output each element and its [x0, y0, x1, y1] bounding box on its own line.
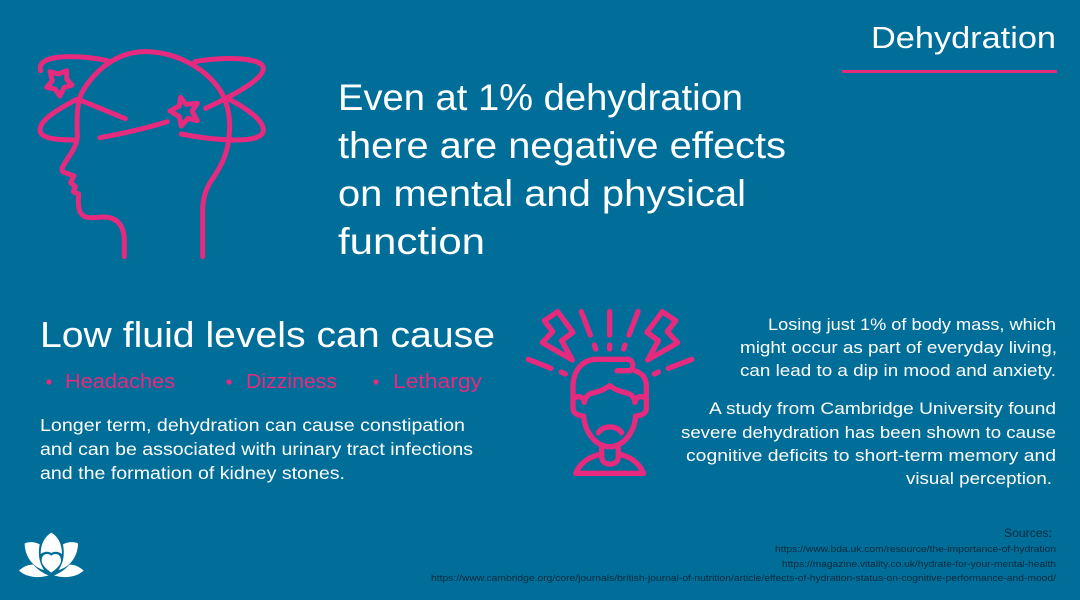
symptom list [46, 371, 482, 393]
sources [431, 528, 1057, 583]
text block: long-term effects [40, 415, 473, 483]
symptom list: Lethargy [393, 371, 482, 393]
heading: key statement: there are negative effects [338, 125, 786, 166]
text block: Cambridge study: cognitive deficits to short-term memory and [686, 446, 1056, 465]
sources: https://www.cambridge.org/core/journals/british-journal-of-nutrition/article/effects-of-hydration-status-on-cognitive-performance-and-mood/ [431, 573, 1057, 583]
text block: Cambridge study: severe dehydration has been shown to cause [681, 423, 1056, 442]
icon: man with headache [528, 312, 692, 473]
heading: low fluid levels: Low fluid levels can cause [40, 314, 495, 355]
text block: Cambridge study: A study from Cambridge University found [709, 399, 1056, 418]
title: Dehydration: Dehydration [871, 20, 1056, 55]
text block: Cambridge study: visual perception. [906, 469, 1052, 488]
text block: mood and anxiety [740, 315, 1057, 380]
symptom list: Headaches [65, 371, 175, 393]
text block: Cambridge study [681, 399, 1056, 488]
text block: long-term effects: and can be associated with urinary tract infections [40, 439, 473, 459]
symptom list: Dizziness [246, 371, 337, 393]
sources: https://www.bda.uk.com/resource/the-importance-of-hydration [775, 544, 1056, 554]
text block: long-term effects: Longer term, dehydration can cause constipation [40, 415, 465, 435]
text block: mood and anxiety: Losing just 1% of body mass, which [768, 315, 1056, 334]
text block: mood and anxiety: can lead to a dip in mood and anxiety. [740, 361, 1056, 380]
heading: key statement: function [338, 221, 485, 262]
title: Dehydration [842, 20, 1057, 73]
logo: white lotus with heart [19, 533, 84, 577]
heading: key statement [338, 77, 786, 262]
sources: https://magazine.vitality.co.uk/hydrate-for-your-mental-health [782, 559, 1056, 569]
text block: long-term effects: and the formation of kidney stones. [40, 463, 345, 483]
text block: mood and anxiety: might occur as part of everyday living, [740, 338, 1057, 357]
heading: key statement: Even at 1% dehydration [338, 77, 743, 118]
sources: Sources: [1004, 528, 1052, 540]
icon: dizzy head with orbits and stars [40, 52, 263, 257]
heading: key statement: on mental and physical [338, 173, 746, 214]
